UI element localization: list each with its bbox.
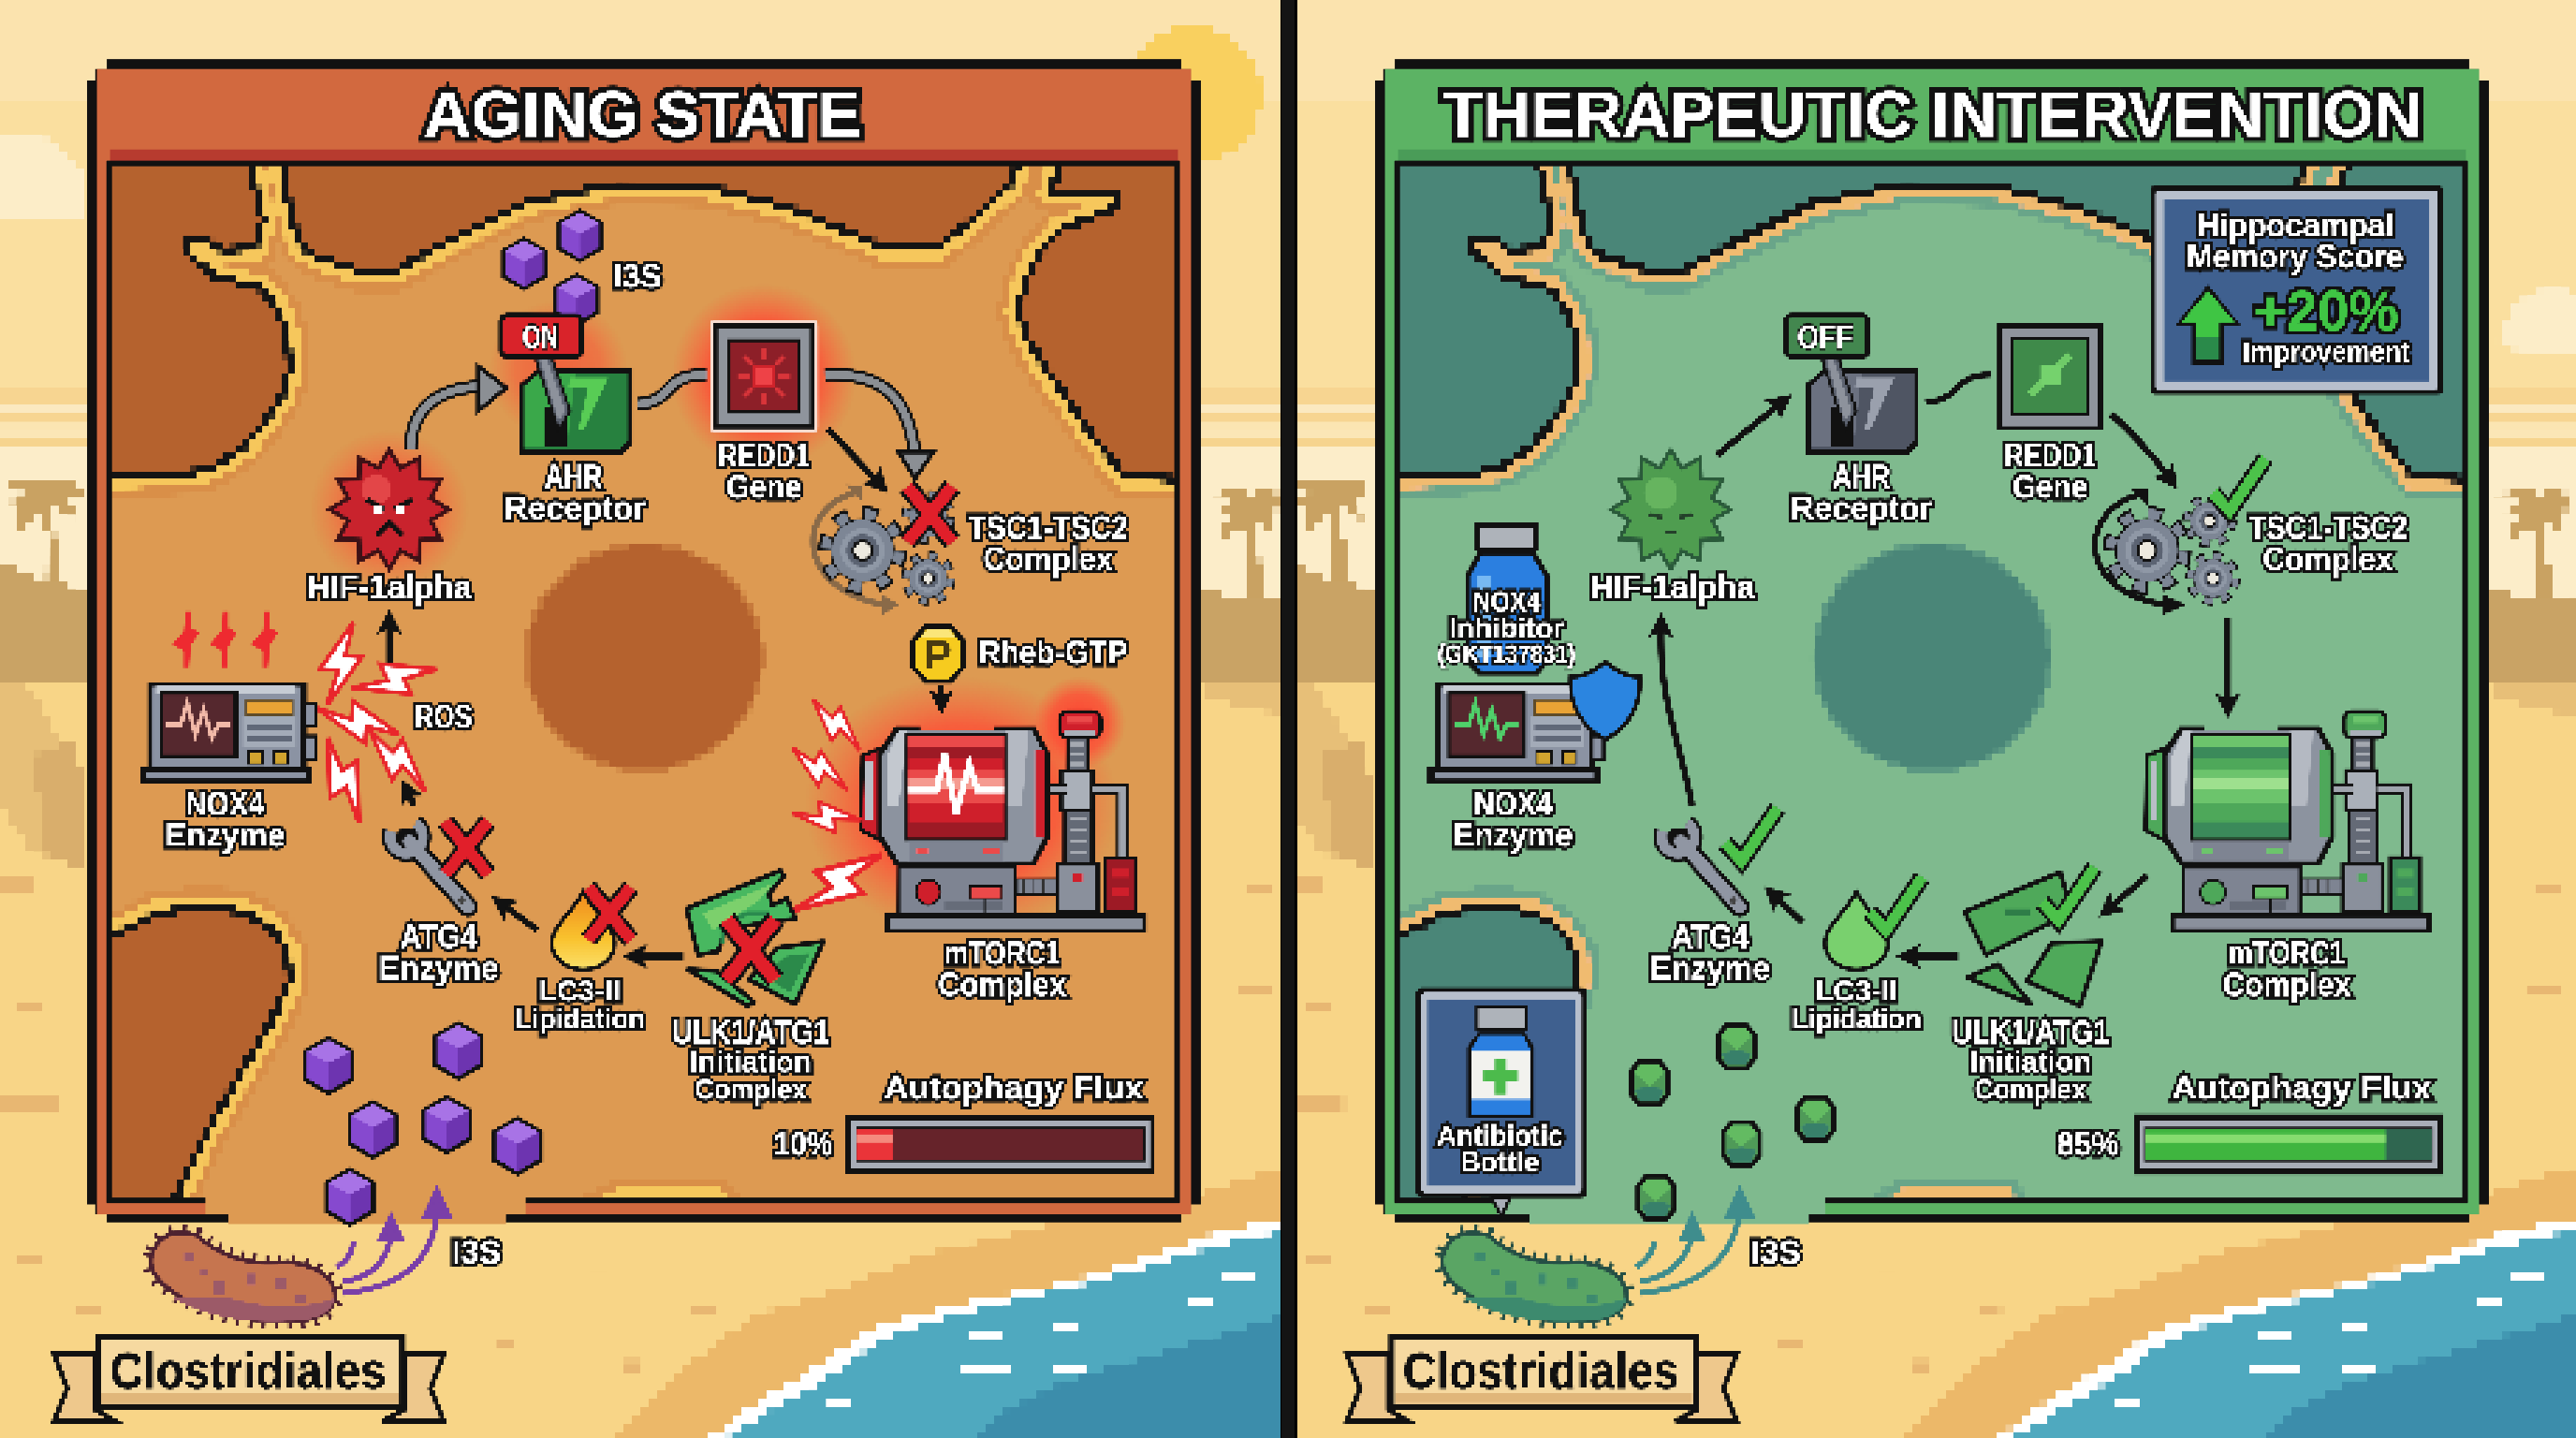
icon: wrench [1661,823,1740,907]
label: mTORC1 Complex: mTORC1 [944,935,1061,972]
label: TSC complex [2248,510,2408,578]
connector: AHR to REDD1 [1925,374,1991,403]
therapy panel text [1403,79,2432,1400]
cell body with membrane and nucleus [91,148,1199,1225]
callout: memory score box [2150,185,2443,394]
panel frame: therapy [1375,59,2489,1223]
icon: REDD1 gene active [710,320,818,433]
label: NOX4 Enzyme: NOX4 [185,786,265,823]
arrow: ULK to LC3 [640,954,683,958]
label: Hippocampal Memory Score [2187,208,2404,275]
label: LC3-II Lipidation [515,975,645,1035]
label: REDD1 Gene: Gene [2012,469,2088,506]
label: AHR Receptor: Receptor [1791,491,1932,527]
ROS bolts [300,623,442,828]
icon: Rheb-GTP coin [910,624,966,683]
label: LC3-II Lipidation: LC3-II [539,975,621,1007]
label: TSC complex: TSC1-TSC2 [969,510,1128,547]
icon: ULK1/ATG1 broken [687,871,823,1005]
label: TSC complex: TSC1-TSC2 [2248,510,2408,547]
arrow: ROS to HIF-1alpha [388,627,391,664]
arrow: Rheb to mTORC1 [940,685,943,697]
label: LC3-II Lipidation: Lipidation [1792,1003,1922,1035]
icon: NOX4 device [139,682,315,784]
label: Rheb-GTP: Rheb-GTP [978,635,1128,671]
label: REDD1 Gene: REDD1 [718,437,810,474]
label: REDD1 Gene: REDD1 [2004,437,2097,474]
status: TSC active [2213,459,2265,511]
label: NOX4 Inhibitor GKT137831: Inhibitor [1449,611,1564,644]
label: ATG4 Enzyme [379,919,499,987]
icon: mTORC1 machine active [861,712,1147,933]
autophagy flux bar [2134,1114,2443,1175]
arrow: REDD1 to TSC (thin) [828,429,875,479]
icon: ULK1/ATG1 active [1965,873,2101,1005]
label: NOX4 Enzyme: Enzyme [1453,817,1573,854]
icon: LC3-II droplet [1825,892,1888,970]
arrow: LC3 to ATG4 [1778,899,1802,922]
label: ULK1/ATG1 Initiation Complex [1952,1014,2110,1106]
I3S cubes inside cell [504,212,601,324]
label: Improvement: Improvement [2243,335,2410,368]
label: NOX4 Inhibitor GKT137831: NOX4 [1472,585,1540,618]
status: ULK active [2042,868,2095,920]
arrow: REDD1 to TSC (thick) [825,374,933,478]
label: AHR Receptor: Receptor [505,491,646,527]
status: ULK blocked [726,919,775,980]
label: NOX4 Enzyme [165,786,285,854]
label: ATG4 Enzyme: ATG4 [1672,919,1749,956]
arrow: ULK to LC3 [1914,954,1958,958]
label: AHR Receptor [1791,459,1932,527]
label: Antibiotic Bottle: Antibiotic [1437,1119,1563,1152]
icon: HIF-1alpha calm [1612,450,1730,568]
label: ATG4 Enzyme: Enzyme [379,950,499,987]
banner shape [54,1338,444,1421]
label: mTORC1 Complex: mTORC1 [2229,935,2345,972]
label: LC3-II Lipidation [1792,975,1922,1035]
inner frame lines [107,161,1179,1203]
value: 85%: 85% [2056,1126,2119,1163]
label: NOX4 Enzyme [1453,786,1573,854]
banner shape [1347,1338,1736,1421]
arrow: ATG4 to ROS [409,795,414,805]
divider between panels [1281,0,1295,1438]
arrow: ATG4 to HIF-1alpha [1661,631,1692,805]
label: ULK1/ATG1 Initiation Complex [672,1014,829,1106]
label: REDD1 Gene [2004,437,2097,506]
icon: REDD1 gene inactive [1998,324,2103,431]
label: I3S outside: I3S [452,1235,501,1271]
label: ATG4 Enzyme: Enzyme [1650,950,1770,987]
label: I3S: I3S [613,258,662,295]
label: ULK1/ATG1 Initiation Complex: Initiation [690,1045,812,1078]
panel frame: aging [87,59,1201,1223]
NOX4 alarm bolts [172,611,278,668]
label: HIF-1alpha: HIF-1alpha [1590,569,1755,606]
bottom opening in frame [205,1197,526,1225]
icon: LC3-II droplet [552,892,614,970]
label: mTORC1 Complex: Complex [2223,967,2351,1004]
label: TSC complex: Complex [983,541,1114,578]
inner frame lines [1395,161,2467,1203]
icon: AHR switch inactive [1806,359,1919,455]
gears with rotation arrows [813,485,948,614]
panel: aging state [54,59,1201,1421]
label: I3S outside: I3S [1751,1235,1801,1271]
label: AHR Receptor: AHR [545,459,602,495]
bottom opening in frame [1497,1197,1825,1225]
panel: therapeutic intervention [1347,59,2489,1421]
arrow: mTORC1 to ULK [2113,875,2147,905]
value: +20%: +20% [2254,279,2398,344]
label: ULK1/ATG1 Initiation Complex: Complex [695,1073,807,1106]
icon: Clostridiales bacterium calm [1442,1233,1627,1321]
icon: AHR switch active [520,359,633,455]
label: TSC complex: Complex [2263,541,2393,578]
arrow: TSC to mTORC1 [2226,618,2230,700]
label: NOX4 Inhibitor GKT137831: (GKT137831) [1438,638,1575,668]
label: Autophagy Flux: Autophagy Flux [2172,1070,2432,1107]
arrow: HIF-1alpha to AHR [1717,406,1778,455]
label: OFF: OFF [1797,319,1853,356]
arrow: REDD1 to TSC [2111,414,2167,475]
cell body with membrane and nucleus [1379,148,2487,1225]
icon: shield [1571,662,1640,740]
callout: antibiotic box [1416,988,1587,1216]
status: LC3 blocked [588,888,631,940]
I3S pellets [1632,1025,1834,1219]
label: AHR Receptor: AHR [1833,459,1890,495]
ON tag [501,315,581,357]
label: ULK1/ATG1 Initiation Complex: Initiation [1969,1045,2091,1078]
label: REDD1 Gene: Gene [726,469,801,506]
bolts around mTORC1 [783,694,889,936]
gears with rotation arrows [2095,488,2232,614]
arrow: LC3 to ATG4 [506,907,537,930]
connector: AHR to REDD1 [637,374,707,404]
label: NOX4 Enzyme: Enzyme [165,817,285,854]
label: P on coin: P [925,632,952,678]
arrow: HIF-1alpha to AHR [411,366,506,450]
I3S cubes scattered [305,1023,540,1225]
title: therapeutic intervention: THERAPEUTIC INTERVENTION [1442,79,2422,151]
label: ATG4 Enzyme [1650,919,1770,987]
icon: HIF-1alpha angry [330,450,448,568]
OFF tag [1786,315,1868,357]
label: LC3-II Lipidation: Lipidation [515,1003,645,1035]
icon: NOX4 device [1427,682,1603,784]
title: aging state: AGING STATE [424,79,861,151]
label: HIF-1alpha: HIF-1alpha [307,569,472,606]
label: ROS: ROS [415,699,473,736]
label: Antibiotic Bottle [1437,1119,1563,1178]
label: LC3-II Lipidation: LC3-II [1815,975,1897,1007]
label: ATG4 Enzyme: ATG4 [400,919,477,956]
icon: Clostridiales bacterium [151,1233,335,1321]
label: AHR Receptor [505,459,646,527]
red glows [311,285,1125,933]
icon: mTORC1 machine calm [2145,712,2432,933]
label: ULK1/ATG1 Initiation Complex: ULK1/ATG1 [672,1014,829,1050]
aging panel text [110,79,1144,1400]
value: 10%: 10% [774,1126,833,1163]
label: mTORC1 Complex [938,935,1066,1004]
label: REDD1 Gene [718,437,810,506]
label: NOX4 Enzyme: NOX4 [1473,786,1553,823]
label: Autophagy Flux: Autophagy Flux [884,1070,1144,1107]
label: Hippocampal Memory Score: Memory Score [2187,239,2404,275]
status: TSC blocked [907,487,952,542]
status: ATG4 blocked [446,822,488,874]
label: mTORC1 Complex [2223,935,2351,1004]
label: ON: ON [522,319,559,356]
label: NOX4 Inhibitor GKT137831 [1438,585,1575,668]
label: TSC complex [969,510,1128,578]
autophagy flux bar [846,1114,1155,1175]
label: ULK1/ATG1 Initiation Complex: ULK1/ATG1 [1952,1014,2110,1050]
label: mTORC1 Complex: Complex [938,967,1066,1004]
label: ULK1/ATG1 Initiation Complex: Complex [1975,1073,2086,1106]
label: Clostridiales: Clostridiales [110,1343,386,1400]
I3S release arrows [1636,1191,1751,1293]
label: Hippocampal Memory Score: Hippocampal [2197,208,2393,244]
label: Antibiotic Bottle: Bottle [1460,1145,1540,1178]
label: Clostridiales: Clostridiales [1403,1343,1679,1400]
I3S release arrows [337,1191,448,1293]
status: LC3 active [1869,877,1922,930]
status: ATG4 active [1725,809,1778,861]
icon: wrench [390,823,468,907]
icon: NOX4 inhibitor bottle [1466,522,1549,675]
